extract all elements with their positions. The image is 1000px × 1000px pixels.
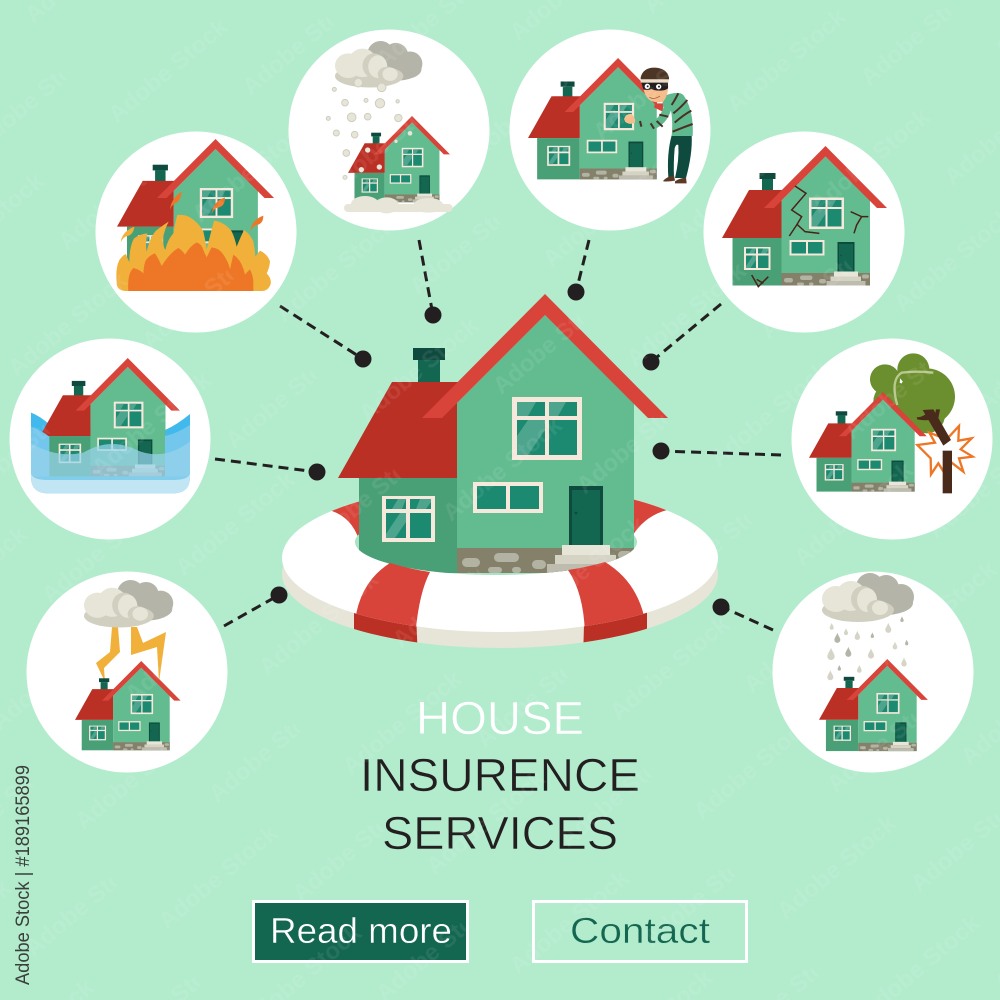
button: read more: Read more xyxy=(270,910,452,951)
panel: flood xyxy=(10,338,210,540)
panel: lightning xyxy=(26,572,228,772)
heading: HOUSE: HOUSE xyxy=(416,692,584,744)
panel: rain xyxy=(772,572,974,772)
panel: burglary xyxy=(510,30,710,230)
icon: raindrops xyxy=(827,616,908,680)
icon: snowflakes and drift xyxy=(326,78,453,213)
connector: earthquake xyxy=(642,304,721,370)
connector: flood xyxy=(215,459,326,480)
connector: lightning xyxy=(224,586,288,626)
icon: broken trunk and impact star xyxy=(917,409,973,493)
panel: snow xyxy=(288,30,490,230)
button: contact xyxy=(534,902,746,962)
connector: fire xyxy=(280,306,372,368)
icon: burglar xyxy=(624,68,693,183)
title xyxy=(360,692,640,859)
central house on life ring xyxy=(282,294,718,660)
icon: snow cloud xyxy=(335,41,422,88)
house xyxy=(338,294,668,573)
button: read more xyxy=(254,902,468,962)
icon: tree crown xyxy=(870,353,955,433)
icon: flood water xyxy=(31,425,190,493)
life ring front stripes xyxy=(354,562,647,642)
icon: storm cloud xyxy=(84,580,173,628)
icon: lightning bolts xyxy=(96,627,166,682)
panel: fire xyxy=(96,132,296,332)
life ring back xyxy=(282,500,718,648)
connector: fallen tree xyxy=(652,442,781,460)
connector: snow xyxy=(419,240,442,324)
panel: fallen tree xyxy=(792,338,992,540)
stock image id: Adobe Stock | #189165899 xyxy=(13,765,34,985)
icon: rain cloud xyxy=(822,573,914,622)
panel: earthquake xyxy=(704,132,904,332)
icon: wall cracks xyxy=(752,186,868,287)
connector: rain xyxy=(712,598,773,630)
heading: INSURENCE: INSURENCE xyxy=(360,749,640,801)
icon: flames xyxy=(116,192,271,291)
heading: SERVICES: SERVICES xyxy=(382,807,618,859)
connector: burglary xyxy=(568,240,589,300)
button: contact: Contact xyxy=(570,910,710,951)
